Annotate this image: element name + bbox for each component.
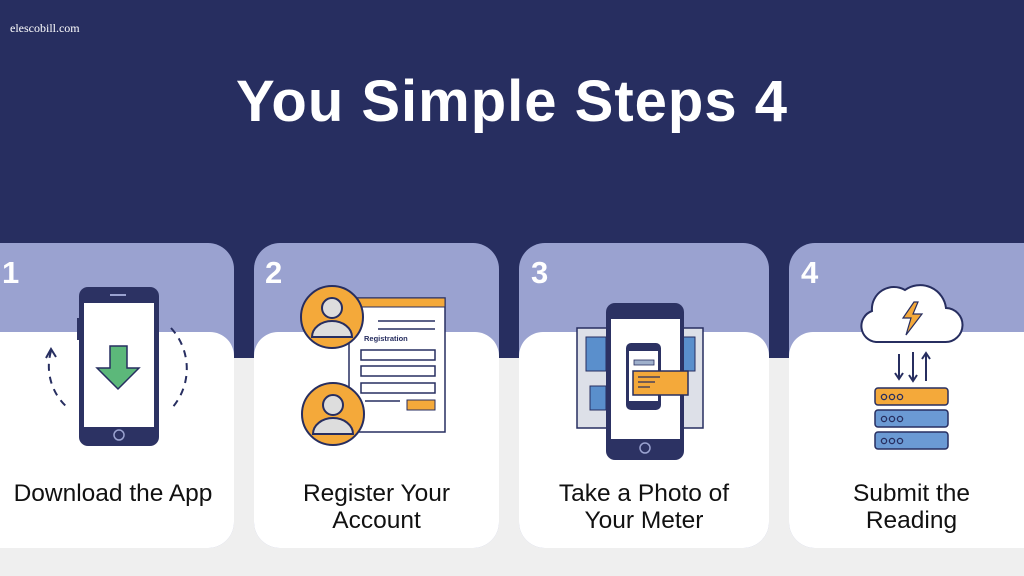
panel: step 1: 1 xyxy=(2,255,19,290)
site label: elescobill.com xyxy=(10,21,80,35)
panel: step 2 xyxy=(254,243,499,548)
panel: step 1: Download the App xyxy=(14,480,212,507)
panel: step 3: 3 xyxy=(531,255,548,290)
panel: step 4: Submit the xyxy=(853,480,970,507)
icon: phone photo meter xyxy=(577,303,703,460)
panel: step 3: Take a Photo of xyxy=(559,480,729,507)
panel: step 3 xyxy=(519,243,769,548)
panel: step 2: Register Your xyxy=(303,480,450,507)
panel: step 2: 2 xyxy=(265,255,282,290)
panel: step 4: 4 xyxy=(801,255,818,290)
title: You Simple Steps 4 xyxy=(236,69,788,134)
panel: step 1 xyxy=(0,243,234,548)
panel: step 2: Account xyxy=(332,507,421,534)
icon: registration form xyxy=(301,286,445,445)
icon: phone download xyxy=(46,287,187,446)
icon: cloud server xyxy=(861,285,963,449)
panel: step 4 xyxy=(789,243,1024,548)
panel: step 3: Your Meter xyxy=(585,507,703,534)
icon: registration form: Registration xyxy=(364,334,408,343)
panel: step 4: Reading xyxy=(866,507,957,534)
